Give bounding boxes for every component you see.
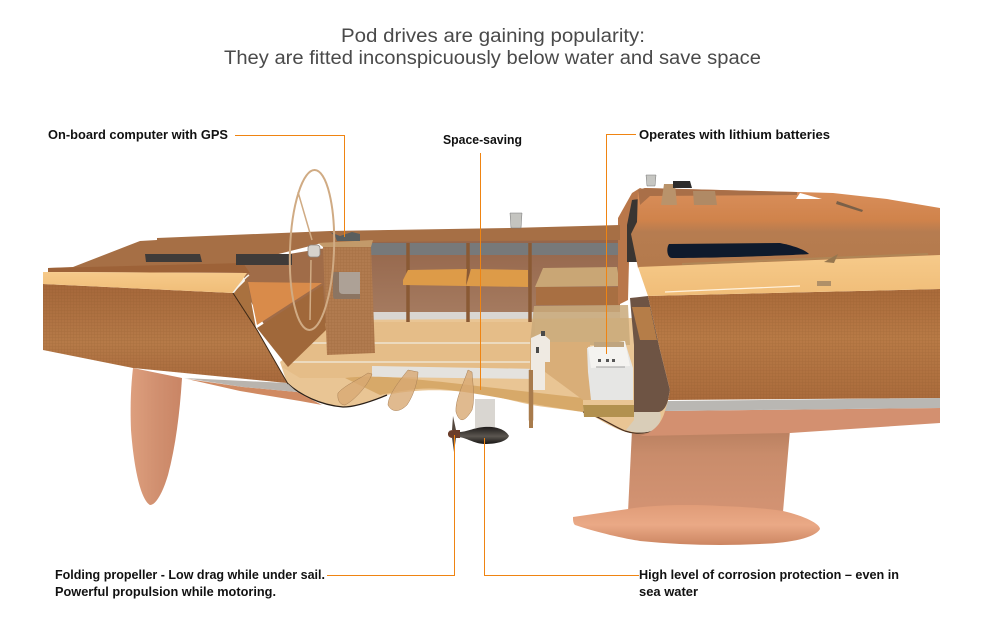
steering pedestal [318,240,375,355]
label: corrosion protection: High level of corrosion protection – even in [639,567,899,582]
interior window strip [370,243,620,255]
rudder [131,368,182,505]
aft hull topsides [43,284,287,383]
label: lithium batteries: Operates with lithium batteries [639,127,830,142]
shelf under battery [583,405,635,417]
pod drive body [458,427,509,444]
label: corrosion protection [639,567,899,599]
label: folding propeller: Folding propeller - Low drag while under sail. [55,567,325,582]
label: folding propeller [55,567,325,599]
label: space-saving: Space-saving [443,132,522,147]
label: on-board computer: On-board computer with GPS [48,127,228,142]
vertical frame [529,370,533,428]
steering wheel [287,169,337,331]
bow side deck [638,255,940,296]
keel bulb [573,505,820,545]
bulkhead dark section [630,296,670,412]
cockpit back wall [240,240,375,370]
coaming [48,225,620,272]
lithium battery [587,341,633,400]
grey sole edge [372,366,540,379]
folding propeller [448,416,460,452]
cabin floor [282,322,535,378]
bow antifouling [640,408,940,436]
cabinet [535,267,620,305]
on-board computer [330,232,360,241]
aft seat wall [248,282,322,325]
leader line: lithium batteries [606,134,636,354]
translucent bulkhead [530,305,630,345]
title: Pod drives are gaining popularity: [341,26,645,47]
aft deck cut edge [233,279,257,330]
interior back wall [370,238,620,322]
leader line: corrosion protection [484,438,639,576]
interior pale strip [372,312,620,322]
bilge cutaway [280,318,668,434]
bow grey boot stripe [665,398,940,411]
bench cushions [403,269,528,287]
leader line: on-board computer [235,136,344,237]
title [224,26,761,69]
boat cutaway illustration [43,169,940,545]
coachroof window [667,243,809,258]
label: folding propeller: Powerful propulsion while motoring. [55,584,276,599]
bow hull topsides [648,289,940,400]
aft hull grey boot stripe [184,378,297,392]
arch post [618,188,646,305]
keel fin [628,430,790,512]
winch aft [510,213,522,228]
bench posts [408,243,530,322]
coaming ports [145,254,292,265]
aft deck [43,272,247,293]
aft hull antifouling [187,379,322,405]
leader line: folding propeller [327,435,454,576]
title: They are fitted inconspicuously below water and save space [224,48,761,69]
tank [531,333,550,390]
label: corrosion protection: sea water [639,584,698,599]
pod strut [475,399,495,428]
aft lazarette panel [257,285,326,367]
coachroof [631,188,940,268]
leader line: space-saving [480,153,482,390]
deck fittings [646,175,863,286]
translucent frames [338,370,533,428]
